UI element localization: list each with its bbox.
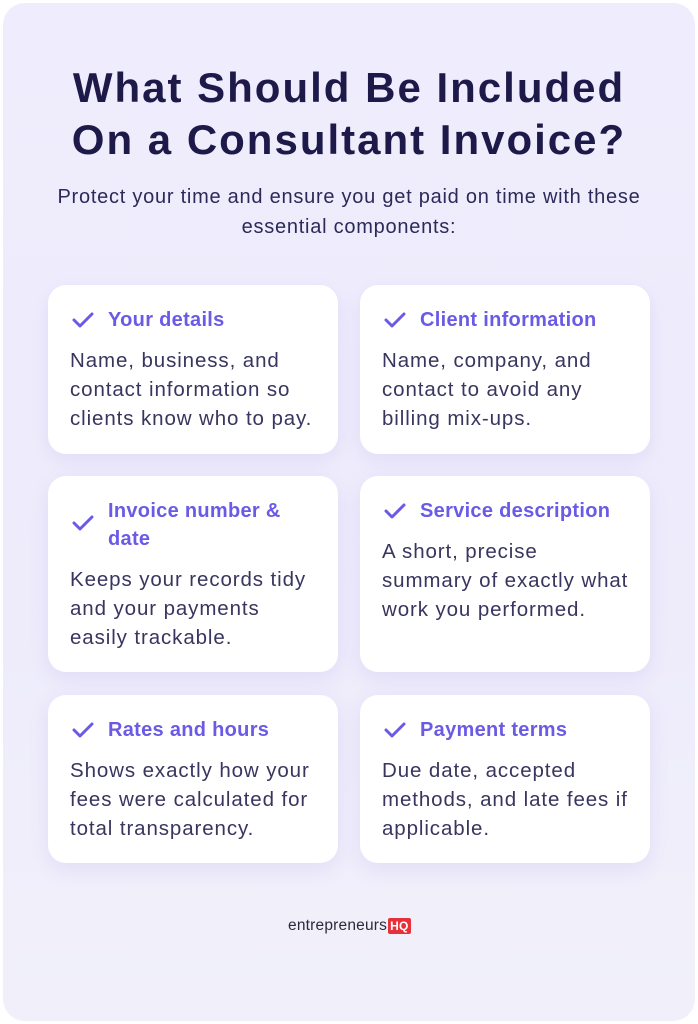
text: Name, business, and contact information so clients know who to pay.	[70, 349, 312, 430]
text: Name, company, and contact to avoid any billing mix-ups.	[382, 349, 592, 430]
heading: rates and hours: Rates and hours	[108, 719, 269, 741]
text: A short, precise summary of exactly what work you performed.	[382, 540, 628, 621]
logo: HQ	[390, 919, 409, 933]
text: Shows exactly how your fees were calculated for total transparency.	[70, 759, 310, 840]
heading: payment terms: Payment terms	[420, 719, 567, 741]
card: service description	[360, 476, 650, 672]
title	[72, 64, 626, 163]
text: Due date, accepted methods, and late fees if applicable.	[382, 759, 628, 840]
card: invoice number	[48, 476, 338, 672]
text: Keeps your records tidy and your payments easily trackable.	[70, 568, 306, 649]
card: rates and hours	[48, 695, 338, 863]
heading: invoice number: Invoice number & date	[108, 500, 281, 550]
card: payment terms	[360, 695, 650, 863]
heading: your details: Your details	[108, 309, 225, 331]
card: your details	[48, 285, 338, 454]
logo: entrepreneurs	[288, 917, 387, 934]
title: On a Consultant Invoice?	[72, 116, 626, 163]
heading: service description: Service description	[420, 500, 610, 522]
subtitle: Protect your time and ensure you get paid on time with these essential components:	[57, 186, 641, 238]
card: client information	[360, 285, 650, 454]
heading: client information: Client information	[420, 309, 597, 331]
title: What Should Be Included	[73, 64, 625, 111]
